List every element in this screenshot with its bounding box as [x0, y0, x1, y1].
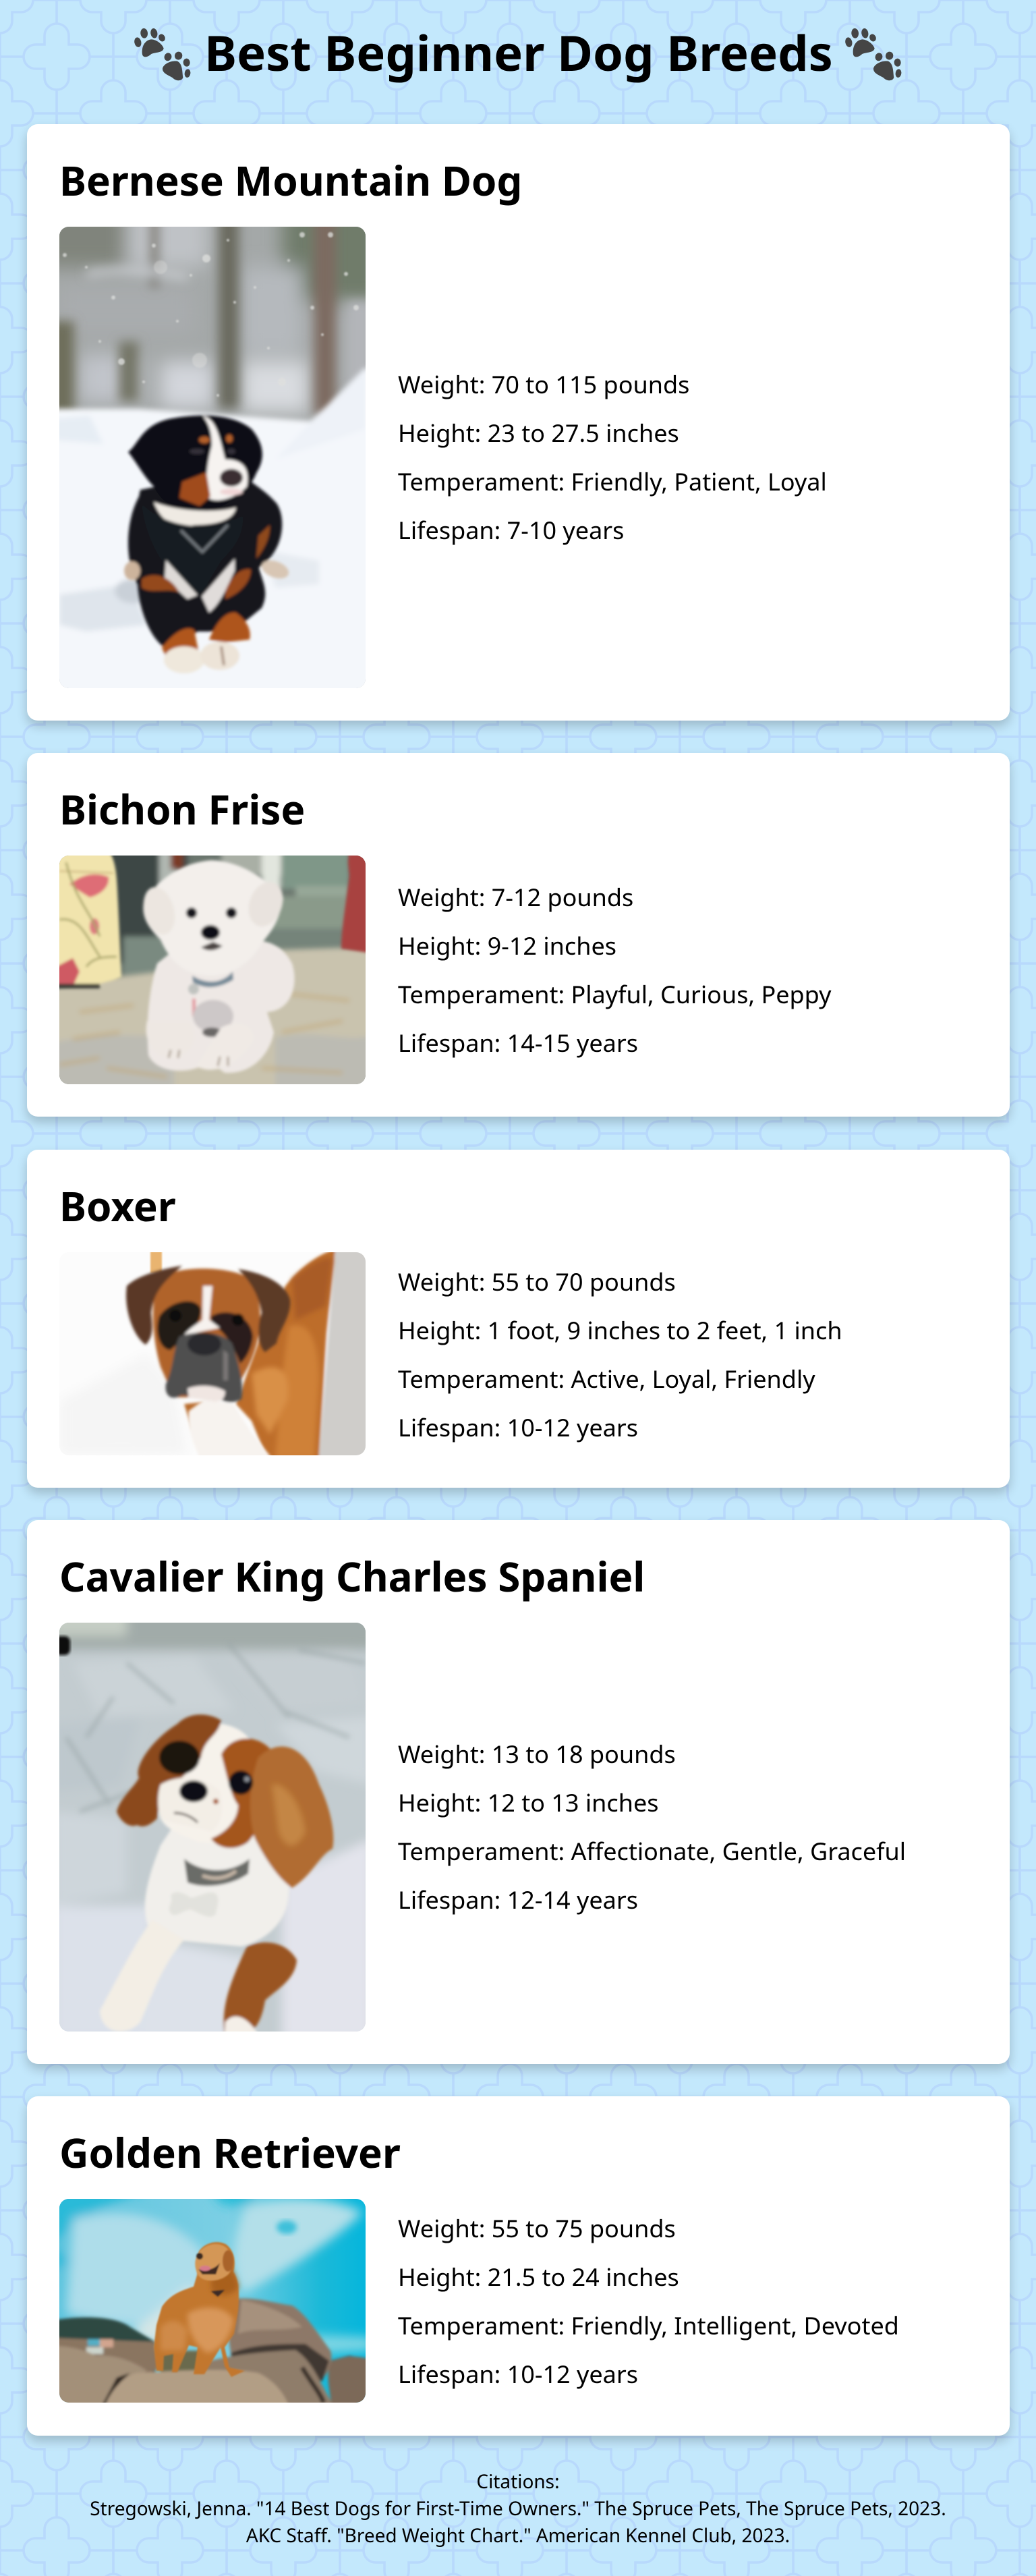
details: Cavalier King Charles Spaniel: Lifespan: 12-14 years: [398, 1883, 638, 1916]
details: Golden Retriever: [398, 2212, 899, 2390]
white ruff: [154, 502, 236, 527]
photo: Cavalier on a bed: [59, 1623, 366, 2032]
heading: Bichon Frise: Bichon Frise: [59, 781, 305, 837]
details: Bichon Frise: Lifespan: 14-15 years: [398, 1026, 638, 1059]
details: Bernese Mountain Dog: Weight: 70 to 115 pounds: [398, 368, 689, 401]
details: Cavalier King Charles Spaniel: [398, 1737, 906, 1916]
chest white: [188, 1399, 272, 1458]
details: Bichon Frise: Temperament: Playful, Curious, Peppy: [398, 978, 831, 1011]
details: Boxer: [398, 1265, 842, 1444]
bone tag: [169, 1892, 219, 1917]
muzzle: [165, 1333, 242, 1402]
front-right leg: [224, 1942, 297, 2036]
details: Cavalier King Charles Spaniel: Weight: 13 to 18 pounds: [398, 1737, 676, 1770]
citations: AKC Staff. "Breed Weight Chart." American Kennel Club, 2023.: [246, 2523, 790, 2548]
photo: Bernese Mountain Dog in snow: [59, 227, 366, 688]
icon: paw prints left: [134, 28, 190, 81]
ears: [126, 1266, 182, 1345]
body: [236, 1249, 335, 1465]
details: Cavalier King Charles Spaniel: Height: 12 to 13 inches: [398, 1786, 658, 1819]
masks: [157, 1301, 201, 1350]
panel: Golden Retriever: [27, 2096, 1010, 2436]
details: Bernese Mountain Dog: Temperament: Friendly, Patient, Loyal: [398, 465, 827, 498]
panel: [318, 1249, 376, 1465]
details: Bichon Frise: Weight: 7-12 pounds: [398, 880, 633, 914]
left ear: [117, 1714, 221, 1826]
citations: [90, 2469, 946, 2548]
dog silhouette: [154, 2242, 245, 2377]
details: Boxer: Weight: 55 to 70 pounds: [398, 1265, 676, 1298]
icon: paw prints right: [845, 28, 901, 81]
right face brown: [211, 1739, 272, 1848]
tan chest: [142, 575, 179, 592]
details: Bernese Mountain Dog: Height: 23 to 27.5 inches: [398, 416, 679, 449]
photo: Bichon Frise on rug: [59, 856, 366, 1084]
details: Boxer: Lifespan: 10-12 years: [398, 1411, 638, 1444]
citations: Citations:: [476, 2469, 560, 2494]
paws: [146, 1021, 195, 1059]
photo: Golden Retriever on rocks: [59, 2199, 366, 2403]
head white: [161, 1724, 262, 1845]
details: Bernese Mountain Dog: [398, 368, 827, 547]
details: Golden Retriever: Lifespan: 10-12 years: [398, 2357, 638, 2390]
head: [153, 1268, 260, 1397]
side paws: [259, 557, 291, 582]
ottoman: [53, 849, 121, 984]
collar: [192, 972, 233, 987]
details: Bernese Mountain Dog: Lifespan: 7-10 years: [398, 513, 624, 547]
heading: Cavalier King Charles Spaniel: Cavalier King Charles Spaniel: [59, 1548, 645, 1604]
snow flakes: [63, 232, 359, 397]
head: [143, 860, 283, 976]
panel: Bichon Frise: [27, 753, 1010, 1117]
body: [128, 470, 282, 650]
bandana: [142, 503, 243, 595]
details: Golden Retriever: Temperament: Friendly, Intelligent, Devoted: [398, 2309, 899, 2342]
dog body: [148, 941, 295, 1073]
eye: [229, 1770, 253, 1795]
white chest: [165, 560, 198, 599]
photo: Boxer looking up: [63, 1252, 366, 1455]
heading: Bernese Mountain Dog: Bernese Mountain Dog: [59, 152, 522, 208]
citations: Stregowski, Jenna. "14 Best Dogs for First-Time Owners." The Spruce Pets, The Spruce Pets, 2023.: [90, 2496, 946, 2521]
body: [145, 1825, 289, 1947]
panel: Bernese Mountain Dog: [27, 124, 1010, 721]
right ear: [250, 1747, 333, 1888]
panel: Boxer: [27, 1150, 1010, 1488]
details: Cavalier King Charles Spaniel: Temperament: Affectionate, Gentle, Graceful: [398, 1835, 906, 1868]
red chair: [341, 849, 372, 953]
big rock: [228, 2298, 332, 2381]
hill: [53, 2318, 155, 2374]
muzzle: [158, 1778, 222, 1832]
rocks: [204, 2350, 336, 2409]
details: Boxer: Height: 1 foot, 9 inches to 2 feet, 1 inch: [398, 1314, 842, 1347]
head and ears: [128, 416, 262, 511]
panel: Cavalier King Charles Spaniel: [27, 1520, 1010, 2064]
title: Best Beginner Dog Breeds: [204, 20, 833, 86]
heading: Boxer: Boxer: [59, 1178, 176, 1233]
rug: [46, 947, 379, 1098]
cheek tan: [179, 472, 210, 506]
details: Bichon Frise: Height: 9-12 inches: [398, 929, 616, 962]
chest shade: [193, 1000, 233, 1032]
front-left leg: [100, 1920, 184, 2032]
details: Golden Retriever: Weight: 55 to 75 pounds: [398, 2212, 676, 2245]
details: Bichon Frise: [398, 880, 831, 1059]
white blaze: [203, 416, 248, 501]
collar: [184, 1859, 250, 1886]
details: Golden Retriever: Height: 21.5 to 24 inches: [398, 2260, 679, 2293]
blaze: [181, 1286, 220, 1340]
details: Boxer: Temperament: Active, Loyal, Friendly: [398, 1362, 815, 1395]
heading: Golden Retriever: Golden Retriever: [59, 2125, 401, 2180]
head: [195, 2244, 233, 2280]
nose: [220, 469, 243, 486]
cuffs and paws: [162, 628, 198, 660]
